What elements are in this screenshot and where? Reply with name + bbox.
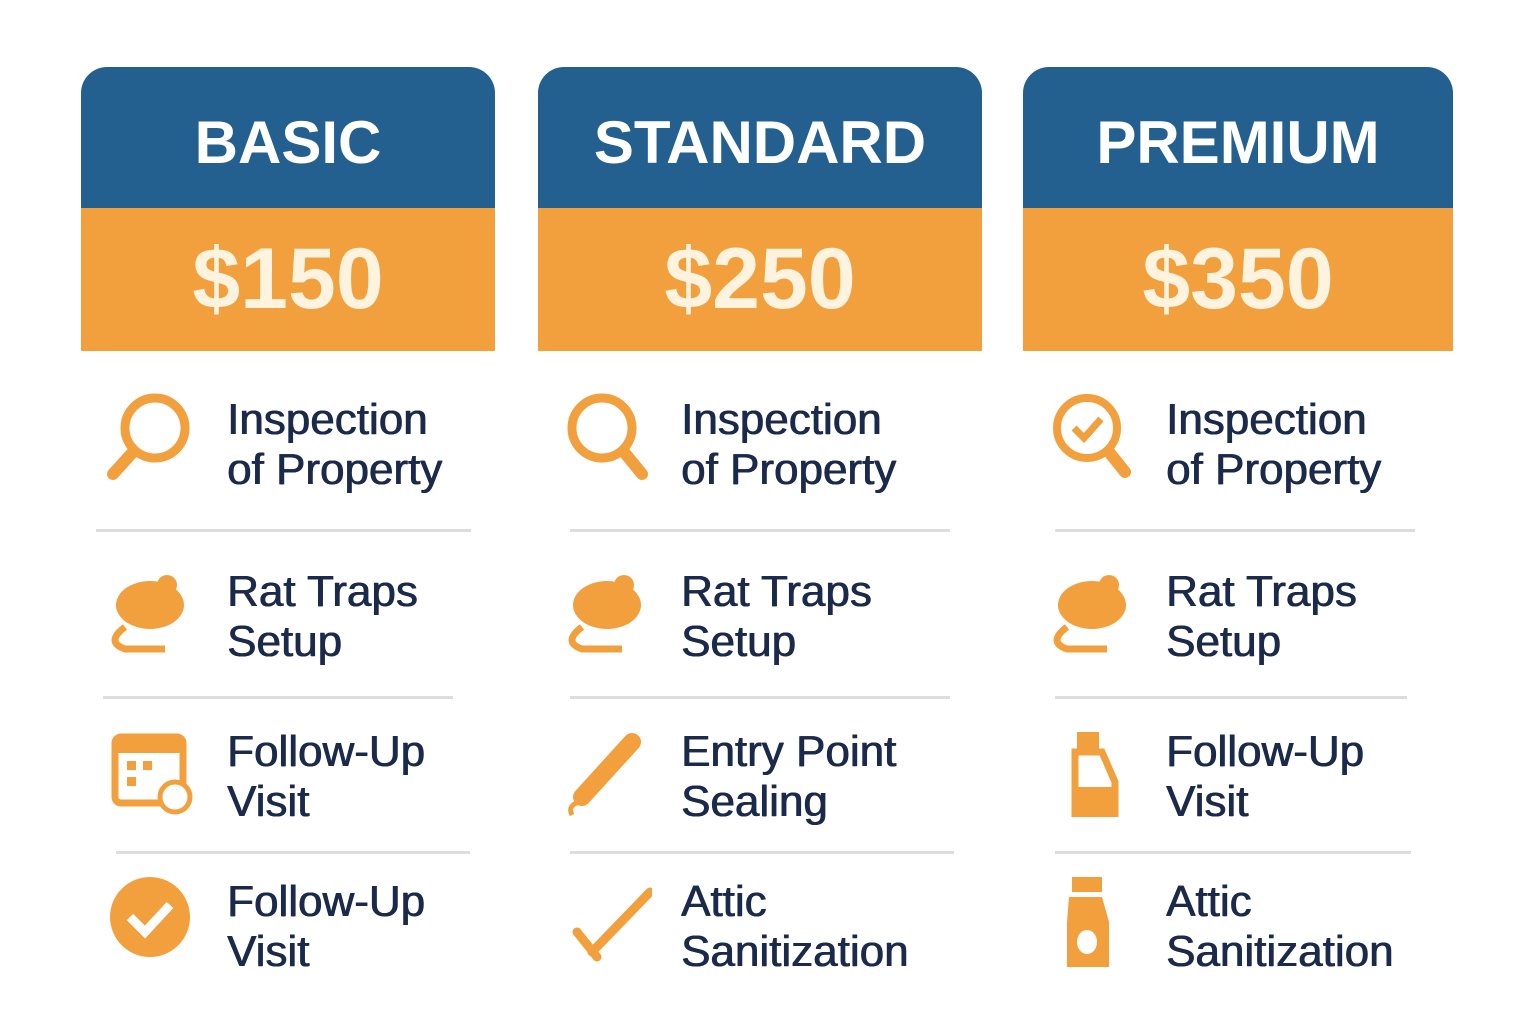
- item: follow-up calendar: Follow-Up: [227, 727, 425, 776]
- item: rat traps: Rat Traps: [227, 567, 418, 616]
- price: basic: [81, 208, 495, 351]
- heading: basic: BASIC: [195, 109, 381, 176]
- heading: standard: STANDARD: [594, 109, 926, 176]
- item: inspection: [568, 394, 897, 494]
- item: entry point sealing: Entry Point: [681, 727, 896, 776]
- item: follow-up check: [110, 877, 425, 976]
- item: inspection: Inspection: [227, 395, 428, 444]
- item: rat traps: Setup: [227, 617, 342, 666]
- item: rat traps: Rat Traps: [681, 567, 872, 616]
- item: follow-up calendar: Visit: [227, 777, 309, 826]
- price: standard: [538, 208, 982, 351]
- item: entry point sealing: [568, 727, 897, 826]
- heading: standard: [538, 67, 982, 208]
- item: rat traps: Setup: [1166, 617, 1281, 666]
- item: attic sanitization: [572, 877, 908, 976]
- price: premium: $350: [1142, 231, 1334, 327]
- item: attic spray bottle: [1067, 877, 1393, 976]
- item: follow-up spray: Visit: [1166, 777, 1248, 826]
- item: inspection: [1053, 394, 1382, 494]
- heading: basic: [81, 67, 495, 208]
- item: follow-up spray: Follow-Up: [1166, 727, 1364, 776]
- heading: premium: PREMIUM: [1096, 109, 1380, 176]
- item: follow-up check: Follow-Up: [227, 877, 425, 926]
- item: follow-up spray: [1072, 727, 1364, 826]
- price: premium: [1023, 208, 1453, 351]
- item: rat traps: [1054, 567, 1357, 666]
- panel: premium: [1023, 67, 1453, 976]
- panel: basic: [81, 67, 495, 976]
- item: attic sanitization: Attic: [681, 877, 767, 926]
- price: standard: $250: [664, 231, 856, 327]
- item: inspection: Inspection: [681, 395, 882, 444]
- item: attic spray bottle: Attic: [1166, 877, 1252, 926]
- item: rat traps: Rat Traps: [1166, 567, 1357, 616]
- heading: premium: [1023, 67, 1453, 208]
- item: inspection: of Property: [227, 445, 442, 494]
- panel: standard: [538, 67, 982, 976]
- item: inspection: of Property: [1166, 445, 1381, 494]
- item: inspection: Inspection: [1166, 395, 1367, 444]
- item: rat traps: Setup: [681, 617, 796, 666]
- item: follow-up check: Visit: [227, 927, 309, 976]
- item: attic sanitization: Sanitization: [681, 927, 908, 976]
- item: attic spray bottle: Sanitization: [1166, 927, 1393, 976]
- item: inspection: of Property: [681, 445, 896, 494]
- item: rat traps: [568, 567, 872, 666]
- item: follow-up calendar: [112, 727, 425, 826]
- item: inspection: [107, 394, 443, 494]
- item: rat traps: [112, 567, 418, 666]
- item: entry point sealing: Sealing: [681, 777, 828, 826]
- price: basic: $150: [192, 231, 384, 327]
